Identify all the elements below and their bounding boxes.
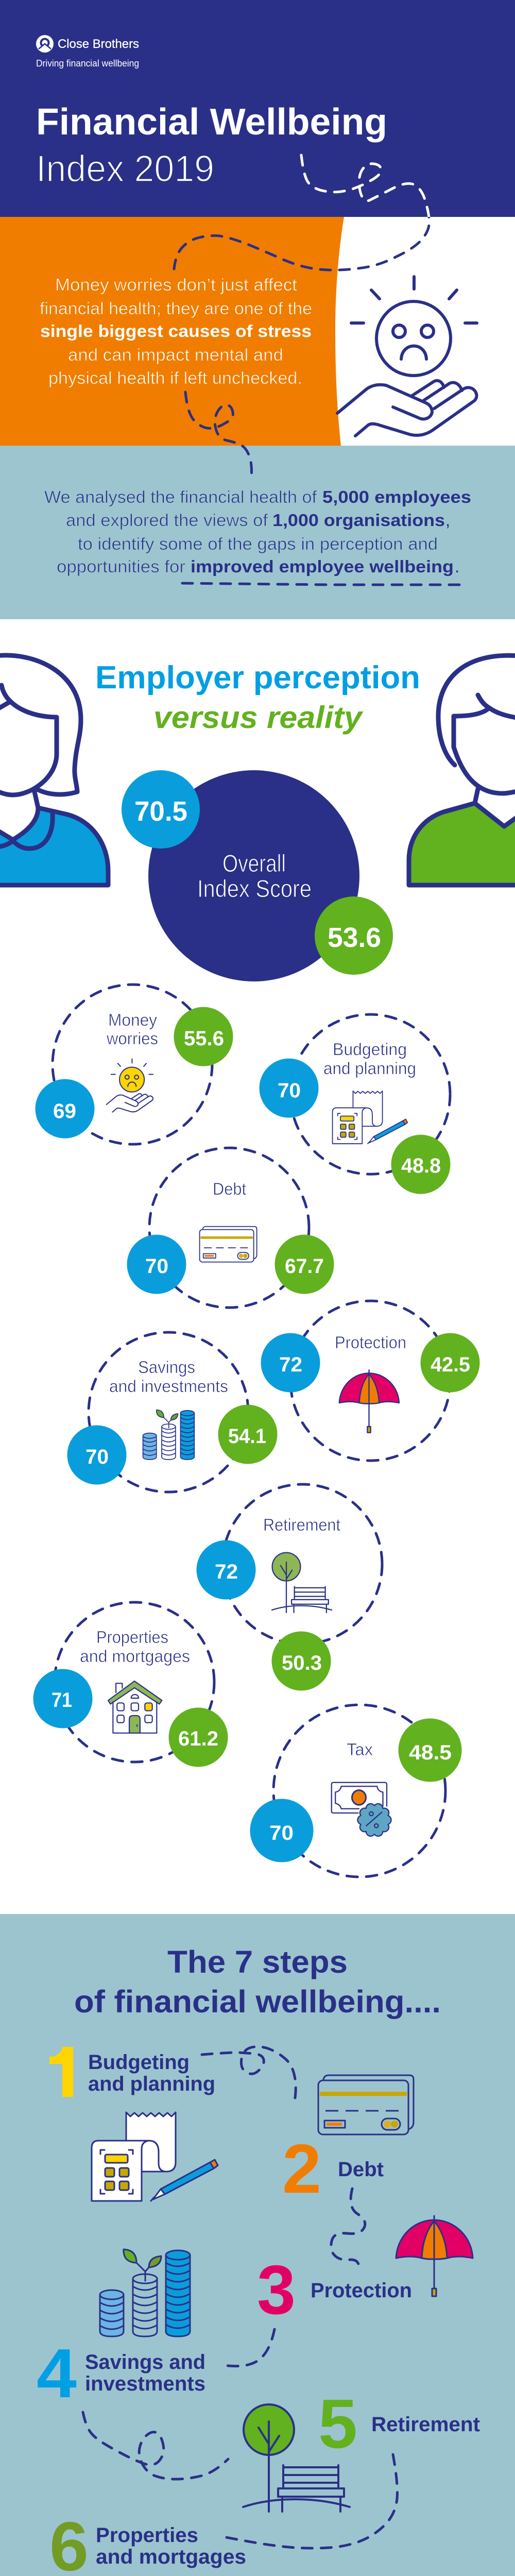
topic: budgeting and planning: Budgeting [333,1040,407,1059]
icon: tree and bench [243,2404,350,2512]
heading: employer perception versus reality [95,660,420,735]
summary text: 1,000 organisations [272,511,445,530]
overall index score circle: Overall [222,850,286,877]
summary text: 5,000 employees [322,487,471,506]
score 72: 72 [279,1353,302,1376]
intro text: physical health if left unchecked. [48,368,302,387]
icon: coin stacks [143,1410,194,1460]
intro text: and can impact mental and [68,345,283,364]
score 54.1: 54.1 [228,1425,266,1448]
step 4: savings and investments: Savings and [85,2351,205,2374]
step 2: debt: Debt [338,2158,384,2181]
topic: properties and mortgages: and mortgages [80,1647,190,1666]
step 3: protection: 3 [257,2251,296,2329]
score 42.5: 42.5 [431,1353,470,1376]
score 70: 70 [278,1079,301,1102]
step 2: debt: 2 [282,2130,321,2208]
step 6: properties and mortgages: Properties [96,2524,198,2547]
step 3: protection: Protection [311,2279,412,2302]
score 72 [261,1333,320,1392]
score 55.6 [174,1007,233,1066]
step 1: budgeting and planning [44,2034,218,2201]
topic: tax: Tax [347,1740,373,1759]
score 70 [260,1058,318,1118]
topic: money worries: Money [108,1010,157,1029]
summary text: , [445,511,450,530]
score 71 [33,1669,93,1728]
logo: Close Brothers [58,37,139,51]
overall index score circle: Index Score [197,875,312,902]
topic: budgeting and planning [260,1014,450,1194]
score 70 [250,1799,313,1862]
squiggle: step 2 to 3 [331,2189,365,2272]
reality score: 53.6 [328,922,381,953]
topic: savings and investments: and investments [109,1377,228,1396]
summary text: We analysed the financial health of [44,487,317,506]
icon: tree and bench [272,1553,332,1613]
title [36,101,387,190]
score 70: 70 [145,1255,168,1278]
heading: the 7 steps: The 7 steps [167,1944,348,1979]
step 1: budgeting and planning: Budgeting [88,2051,190,2074]
step 2: debt [282,2075,414,2208]
panel: money worries intro [0,217,515,446]
heading: the 7 steps: of financial wellbeing.... [74,1984,441,2019]
score 70: 70 [269,1822,294,1844]
score 70 [127,1234,186,1294]
topic: money worries: worries [106,1029,158,1048]
score 69 [35,1079,95,1139]
icon: credit card [318,2075,414,2134]
score 54.1 [218,1404,277,1464]
score 72: 72 [215,1561,238,1583]
squiggle: step 5 to 6 [218,2454,397,2548]
step 5: retirement: 5 [318,2385,357,2463]
score 61.2 [169,1707,228,1767]
summary text: and explored the views of [66,511,268,530]
step 1: budgeting and planning: 1 [44,2034,87,2112]
score 69: 69 [53,1100,76,1123]
topic: protection: Protection [335,1333,406,1352]
squiggle: step 4 to 5 [83,2412,228,2479]
score 50.3 [272,1631,331,1691]
topic: savings and investments [67,1332,277,1492]
heading: employer perception versus reality: Employer perception [95,660,420,696]
icon: umbrella [396,2216,473,2296]
icon: coin stacks [100,2249,190,2336]
perception score [122,770,200,849]
icon: worried face in hand [337,277,477,436]
step 6: properties and mortgages: and mortgages [96,2546,246,2568]
topic: tax [250,1705,461,1877]
topic: properties and mortgages [33,1602,228,1767]
topic: properties and mortgages: Properties [96,1628,168,1647]
squiggle: intro text to summary [185,392,251,479]
icon: worried face [107,1059,153,1112]
topic: budgeting and planning: and planning [323,1059,416,1078]
score 72 [197,1540,255,1599]
panel: header [0,0,515,217]
score 42.5 [420,1333,480,1392]
icon: umbrella [339,1370,399,1433]
topic: debt [127,1148,334,1308]
intro text: Money worries don’t just affect [55,275,297,294]
squiggle: step 1 to 2 [202,2047,296,2105]
topic: money worries [35,985,233,1144]
dashed underline [182,583,464,585]
icon: employee figure [409,655,515,885]
topic: retirement [197,1484,382,1691]
score 67.7 [275,1234,334,1294]
panel: seven steps [0,1914,515,2576]
icon: calculator and receipt [92,2112,218,2201]
score 70 [67,1425,127,1485]
score 61.2: 61.2 [178,1727,218,1750]
logo [36,35,139,69]
squiggle: header to intro text [174,155,429,270]
topic: protection [261,1301,480,1461]
icon: employer figure [0,655,108,885]
icon: house [108,1681,162,1733]
title: Financial Wellbeing [36,101,387,143]
score 48.8: 48.8 [401,1155,441,1177]
score 67.7: 67.7 [285,1255,324,1278]
step 6: properties and mortgages [49,2507,246,2576]
intro text [40,275,312,387]
squiggle: step 3 to 4 [224,2329,274,2366]
icon: calculator and receipt [333,1091,407,1144]
step 1: budgeting and planning: and planning [88,2073,215,2095]
step 5: retirement [243,2385,480,2512]
intro text: financial health; they are one of the [40,299,312,318]
panel: research summary [0,446,515,619]
icon: credit card [200,1227,257,1262]
icon: banknote and percent badge [332,1783,391,1836]
heading: employer perception versus reality: versus reality [153,700,364,735]
topic: retirement: Retirement [263,1515,340,1534]
topic: debt: Debt [213,1179,246,1198]
overall index score circle [122,770,393,981]
score 48.5: 48.5 [409,1741,452,1764]
topic: savings and investments: Savings [138,1358,195,1377]
step 5: retirement: Retirement [371,2413,480,2436]
intro text: single biggest causes of stress [40,321,312,341]
step 4: savings and investments: investments [85,2372,205,2395]
summary text: opportunities for [57,557,185,576]
summary text: improved employee wellbeing [191,557,454,576]
heading: the 7 steps [74,1944,441,2019]
summary text [44,487,471,576]
reality score [315,896,393,975]
score 55.6: 55.6 [184,1027,224,1050]
score 48.8 [391,1134,450,1194]
logo: Driving financial wellbeing [36,58,139,69]
summary text: to identify some of the gaps in perception and [78,534,438,553]
step 3: protection [257,2216,473,2329]
score 70: 70 [85,1446,109,1468]
score 50.3: 50.3 [282,1652,322,1674]
step 4: savings and investments: 4 [37,2334,77,2412]
step 4: savings and investments [37,2249,205,2412]
score 71: 71 [52,1689,72,1711]
perception score: 70.5 [134,796,187,827]
summary text: . [455,557,459,576]
score 48.5 [399,1719,461,1782]
title: Index 2019 [36,148,214,190]
